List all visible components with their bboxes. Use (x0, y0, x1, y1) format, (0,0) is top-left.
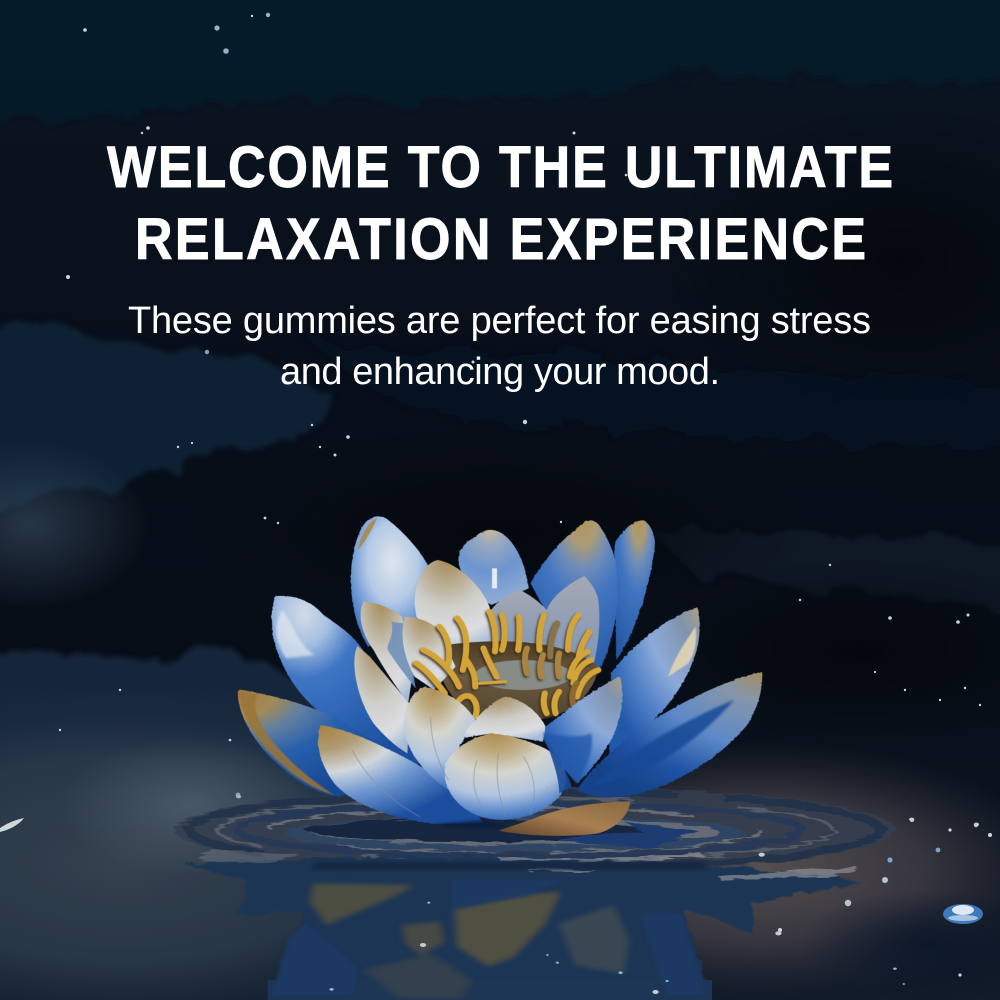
petal: back centre (458, 530, 529, 605)
accent: petal veins (352, 717, 534, 817)
petal: back left (351, 516, 434, 647)
front petals (318, 677, 623, 824)
reflected droplets (236, 795, 979, 994)
accent: blue shadow on cream petal (388, 622, 416, 688)
water droplet (943, 904, 983, 924)
petal: cream back centre (415, 560, 495, 650)
reflection bottom band (268, 980, 712, 1000)
seed pod (475, 660, 572, 690)
ripple highlights over reflection (196, 849, 859, 879)
petal: back right (531, 520, 618, 673)
title: WELCOME TO THE ULTIMATE (107, 134, 893, 200)
gold reflected petals (310, 883, 629, 998)
water ripples and reflection (175, 787, 979, 1000)
subtitle (128, 300, 871, 393)
accent: gold rim of far-left petal (241, 692, 334, 795)
petal: right front (541, 677, 623, 783)
title: RELAXATION EXPERIENCE (135, 206, 866, 272)
title (107, 134, 893, 272)
petal: inner grey right (547, 576, 599, 673)
petal: inner left long (354, 646, 409, 753)
lotus flower (238, 516, 762, 836)
petal: right upper (609, 607, 700, 753)
petal: left large (272, 596, 420, 773)
subtitle: and enhancing your mood. (280, 351, 720, 393)
petal: long front left (318, 725, 484, 824)
accent: dark blue between front petals (543, 732, 572, 793)
accent: pale streak on right upper petal (668, 627, 696, 677)
accent: white streak on back-centre petal (492, 568, 497, 588)
accent: pale wash on left petal (276, 610, 315, 658)
petal: cream left (361, 602, 413, 703)
accent: blue base of right front petal (543, 733, 592, 783)
white smudge at left edge (0, 818, 24, 832)
accent: gold tip on back-left petal (357, 518, 377, 550)
ripple rings (175, 787, 896, 873)
accent: dark shadow under flower (434, 820, 506, 828)
petal: right far (577, 672, 762, 797)
lower glow (460, 740, 1000, 1000)
petal: far right back (614, 520, 655, 660)
dark reflected folds (271, 880, 705, 995)
brown base petal (498, 802, 631, 836)
inner back petals (354, 560, 599, 753)
petal: small centre (461, 697, 546, 742)
centre disc (437, 641, 598, 720)
stamens (416, 612, 598, 717)
petal: front mid left (404, 687, 475, 790)
petal: large front (445, 733, 566, 820)
petal: far left (238, 689, 420, 797)
inner front-left petal (402, 617, 456, 690)
back petals (238, 516, 762, 797)
subtitle: These gummies are perfect for easing stress (128, 300, 871, 342)
petal: inner grey centre (491, 590, 552, 657)
reflection body (185, 857, 859, 993)
accent: blue streak on right far petal (591, 700, 734, 787)
